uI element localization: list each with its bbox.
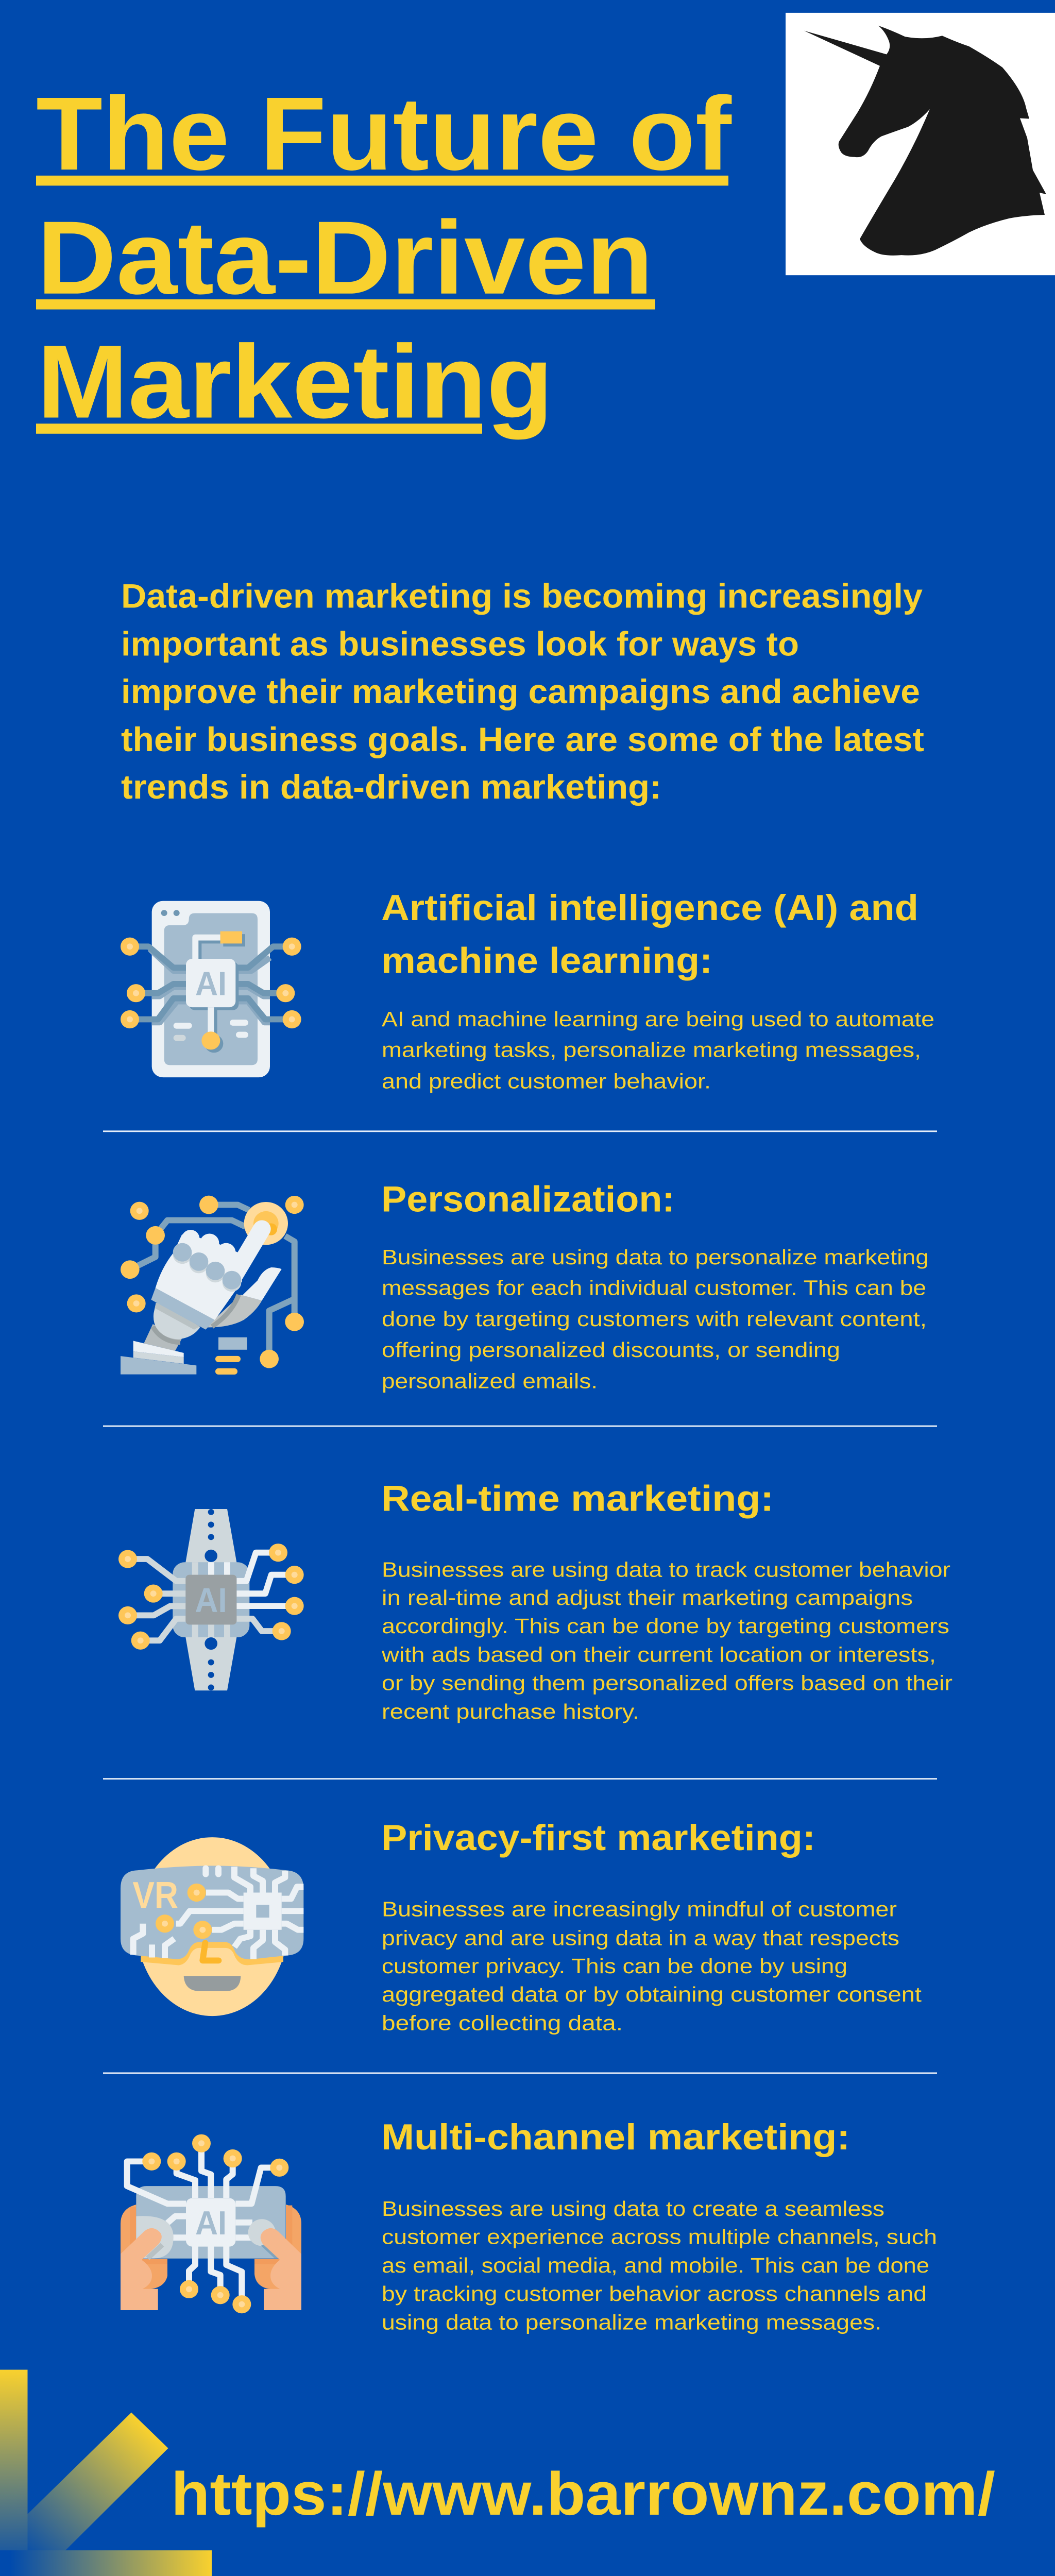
body: multi-channel marketing: using data to personalize marketing messages. [382,2310,881,2334]
body: artificial intelligence [382,1007,934,1093]
body: real-time marketing: accordingly. This can be done by targeting customers [382,1614,949,1638]
body: artificial intelligence: and predict customer behavior. [382,1069,711,1093]
intro text: their business goals. Here are some of the latest [121,721,924,759]
icon: hands holding AI device: AI [195,2204,227,2242]
body: privacy-first marketing [382,1897,922,2035]
icon: robot hand [121,1196,304,1375]
body: multi-channel marketing [382,2196,937,2334]
intro text [121,578,924,806]
body: multi-channel marketing: customer experience across multiple channels, such [382,2225,937,2248]
body: personalization: Businesses are using data to personalize marketing [382,1245,929,1269]
title: Data-Driven [37,200,653,316]
body: personalization: messages for each individual customer. This can be [382,1276,926,1300]
heading: multi-channel marketing: Multi-channel marketing: [381,2117,850,2158]
body: real-time marketing: Businesses are using data to track customer behavior [382,1557,950,1581]
heading: artificial intelligence: Artificial intelligence (AI) and [381,888,918,928]
intro text: important as businesses look for ways to [121,625,799,663]
body: personalization [382,1245,929,1393]
intro text: improve their marketing campaigns and achieve [121,673,920,711]
icon: AI chip on strip [118,1509,304,1690]
body: personalization: offering personalized discounts, or sending [382,1337,840,1362]
icon: AI chip on strip: AI [195,1582,227,1620]
body: personalization: done by targeting customers with relevant content, [382,1307,927,1331]
body: privacy-first marketing: aggregated data or by obtaining customer consent [382,1982,922,2006]
decorative corner arrow [0,2370,212,2576]
footer url: https://www.barrownz.com/ [171,2460,995,2528]
body: artificial intelligence: marketing tasks, personalize marketing messages, [382,1038,921,1062]
body: multi-channel marketing: as email, social media, and mobile. This can be done [382,2253,929,2277]
intro text: trends in data-driven marketing: [121,769,661,806]
body: artificial intelligence: AI and machine learning are being used to automate [382,1007,934,1031]
body: multi-channel marketing: Businesses are using data to create a seamless [382,2196,884,2221]
body: real-time marketing: or by sending them personalized offers based on their [382,1671,952,1694]
body: real-time marketing [381,1557,952,1723]
body: personalization: personalized emails. [382,1369,598,1393]
title: Marketing [37,324,553,440]
panel: personalization [121,1179,929,1393]
body: privacy-first marketing: customer privacy. This can be done by using [382,1954,847,1978]
body: real-time marketing: recent purchase history. [382,1699,639,1723]
heading: privacy-first marketing: Privacy-first marketing: [381,1818,815,1858]
panel: multi-channel marketing [121,2117,937,2334]
icon: VR headset face: VR [132,1875,178,1916]
body: privacy-first marketing: Businesses are increasingly mindful of customer [382,1897,897,1921]
icon: AI phone: AI [195,964,227,1002]
heading: artificial intelligence [381,888,918,981]
body: privacy-first marketing: privacy and are using data in a way that respects [382,1926,899,1950]
heading: real-time marketing: Real-time marketing: [381,1479,774,1519]
icon: VR headset face [121,1837,303,2016]
body: real-time marketing: with ads based on their current location or interests, [381,1642,936,1666]
intro text: Data-driven marketing is becoming increasingly [121,578,923,616]
body: privacy-first marketing: before collecting data. [382,2011,623,2035]
panel: privacy-first marketing [121,1818,922,2035]
title: The Future of [36,76,732,192]
panel: artificial intelligence [121,888,934,1093]
heading: artificial intelligence: machine learning: [381,941,712,981]
heading: personalization: Personalization: [381,1179,675,1219]
icon: AI phone [121,901,301,1077]
logo: unicorn head [786,13,1055,275]
panel: real-time marketing [118,1479,952,1723]
icon: hands holding AI device [121,2134,301,2313]
body: multi-channel marketing: by tracking customer behavior across channels and [382,2281,927,2306]
title [36,76,732,440]
body: real-time marketing: in real-time and adjust their marketing campaigns [382,1586,913,1609]
